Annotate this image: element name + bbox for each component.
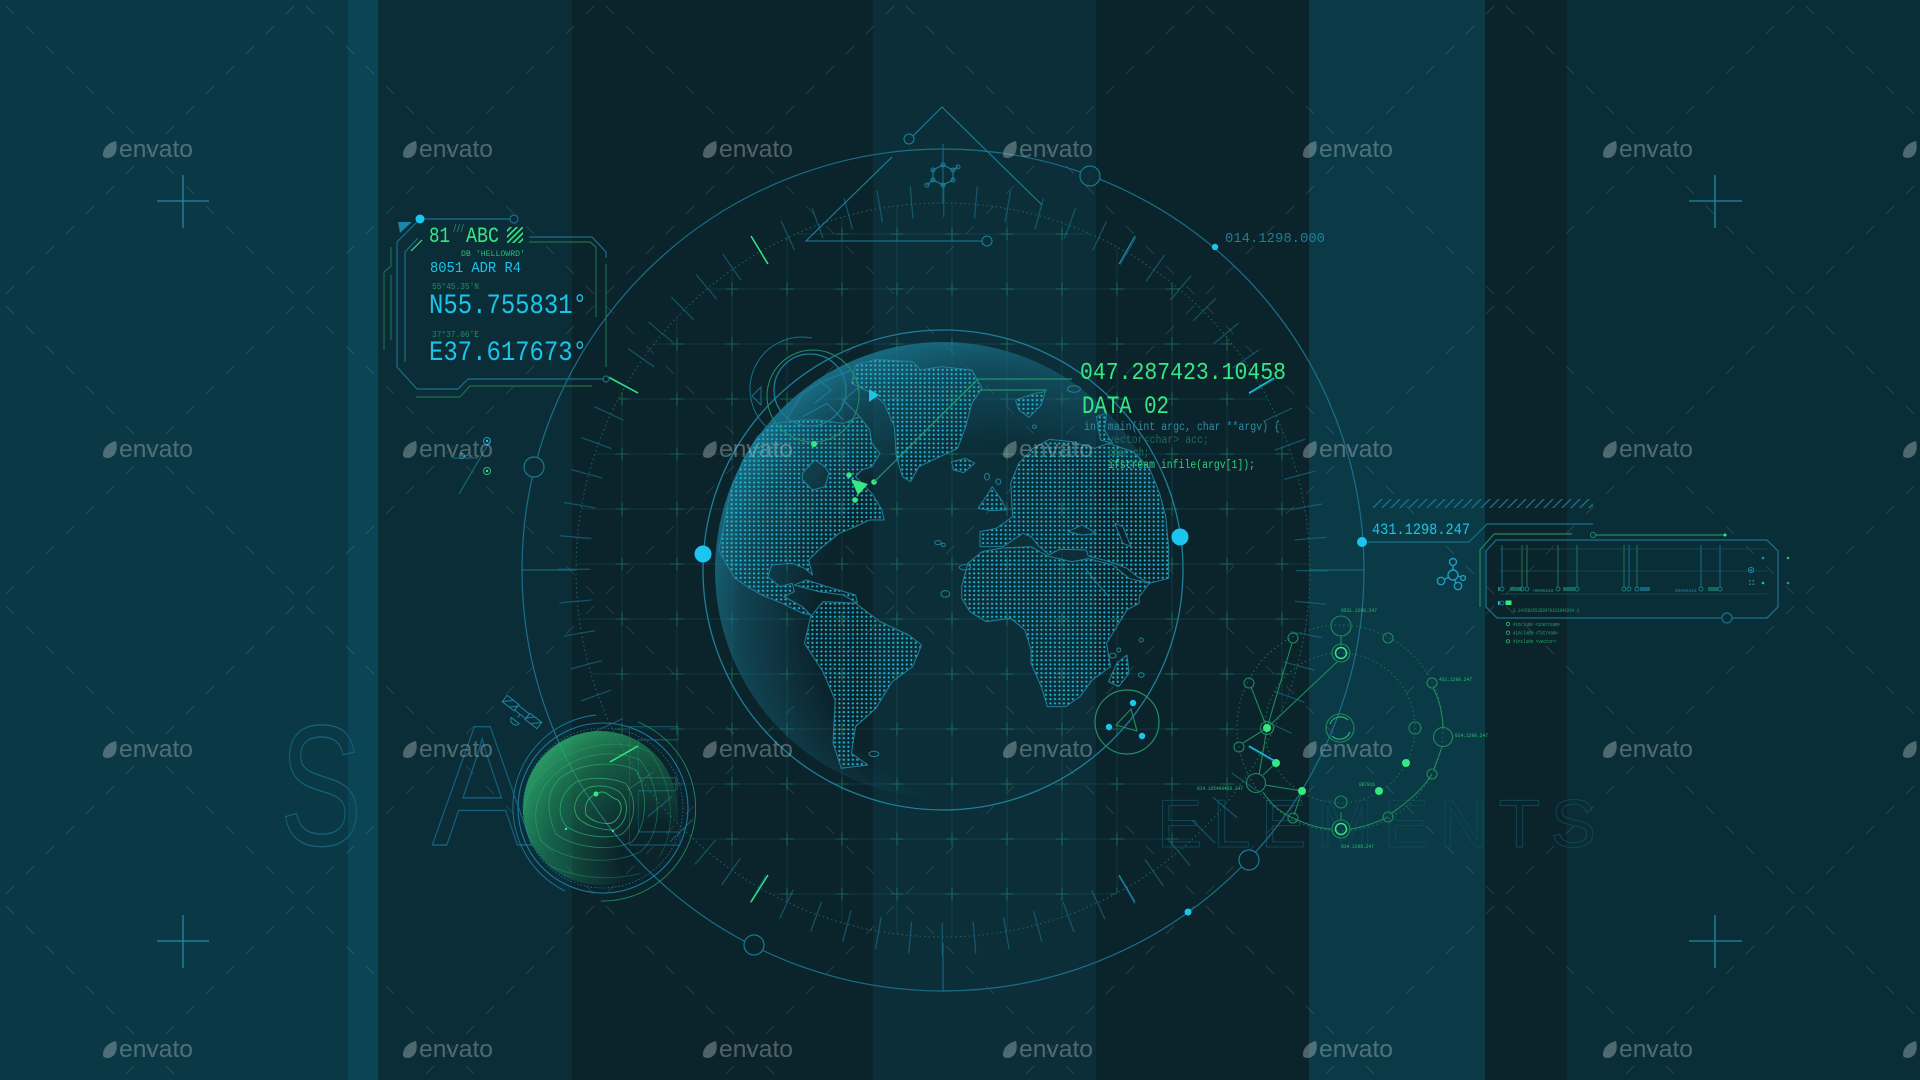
watermarks: envato [119,136,193,163]
data readout: ifstream infile(argv[1]); [1108,459,1255,472]
links [1243,636,1341,820]
globe orbit ring [703,330,1183,810]
dotted world map [719,359,1169,768]
panel end ring and indicators [1722,557,1789,623]
watermarks: envato [1319,736,1393,763]
panel text: DB 'HELLOWRD' [461,249,525,259]
connector [1357,524,1726,607]
green location marker and leader lines [846,379,1072,503]
faint title: SAE: S [280,690,362,882]
watermarks: envato [119,436,193,463]
icon: molecule [1437,558,1465,590]
faint title: SAE: A [432,690,532,882]
tiny bars [1498,587,1718,591]
satellite icon [495,695,542,737]
include list [1506,622,1560,645]
node labels: 431.1298.247 [1439,676,1472,683]
data readout: 047.287423.10458 [1080,360,1286,387]
panel: signal readout [1357,499,1789,645]
faint title: SAE [280,690,684,882]
triangle locator circle [1095,690,1159,754]
data readout: DATA 02 [1082,392,1169,421]
watermarks: envato [1019,736,1093,763]
watermarks: envato [719,1036,793,1063]
panel: signal readout: 05095616 [1675,588,1697,594]
globe sphere [715,342,1171,798]
watermarks: envato [119,736,193,763]
node labels [1197,607,1488,850]
panel: coordinates: /// [453,224,464,236]
node labels: 014.1298.247 [1455,732,1488,739]
watermarks: envato [1619,736,1693,763]
contour lines [523,744,670,878]
watermarks: envato [1319,136,1393,163]
dotted rings [1237,625,1443,831]
watermarks: envato [1319,436,1393,463]
panel: coordinates: 37°37.06'E [432,329,479,340]
green contour planet [513,715,696,901]
orbit markers [694,528,1188,562]
include list: #include <fstream> [1513,630,1558,636]
node labels: 014.1298.247 [1341,843,1374,850]
top triangle with molecule icon [806,107,1042,246]
radar grid [570,200,1316,940]
include list: #include <vector> [1513,639,1556,645]
panel: coordinates: ABC [466,224,499,249]
panel: coordinates: N55.755831° [429,291,587,322]
small node icon left [452,438,490,494]
panel: signal readout: +0095616 [1532,588,1554,594]
outer radar dial [522,144,1364,991]
panel frame [384,214,609,397]
watermarks: envato [1619,136,1693,163]
watermarks: envato [1019,136,1093,163]
node labels: 0531.1298.247 [1341,607,1377,614]
watermarks: envato [1619,1036,1693,1063]
watermarks: envato [1019,1036,1093,1063]
panel frame [1486,540,1778,618]
watermarks: envato [1319,1036,1393,1063]
data readout: int main(int argc, char **argv) { [1084,421,1280,434]
hatch band [1373,499,1593,508]
data readout [1080,360,1286,472]
watermarks: envato [419,436,493,463]
panel: coordinates: 8051 ADR R4 [430,260,521,277]
watermarks: envato [719,436,793,463]
panel header: 81 [429,224,450,249]
target rings over North America [750,337,879,447]
node labels: 887916 [1359,781,1375,788]
coordinate label top right: 014.1298.000 [1225,232,1325,247]
pi line: 3.14159265358979323846264 3 [1513,608,1579,614]
network diagram [1197,607,1488,850]
barcode lines [1500,545,1767,594]
watermarks: envato [719,736,793,763]
faint title: SAE: E [622,690,684,882]
faint title: ELEMENTS: ELEMENTS [1157,786,1596,862]
hatch swatch [507,227,523,243]
watermarks: envato [419,1036,493,1063]
panel: coordinates [384,214,609,397]
watermarks: envato [419,736,493,763]
planet rings [513,715,696,901]
panel: coordinates: 55°45.35'N [432,281,479,292]
green status block [1498,600,1512,605]
watermarks: envato [719,136,793,163]
nodes [1331,616,1351,636]
readout label: 431.1298.247 [1372,521,1470,539]
include list: #include <iostream> [1513,622,1560,628]
watermarks: envato [419,136,493,163]
node labels: 014.165409436.247 [1197,785,1243,792]
watermarks: envato [1619,436,1693,463]
data readout: vector<char> acc; [1108,434,1209,447]
watermarks: envato [119,1036,193,1063]
watermarks: envato [1019,436,1093,463]
data readout: char ch; [1108,447,1149,460]
center icon [1326,714,1354,742]
corner crosshairs [157,175,1742,968]
panel: coordinates: E37.617673° [429,338,587,369]
